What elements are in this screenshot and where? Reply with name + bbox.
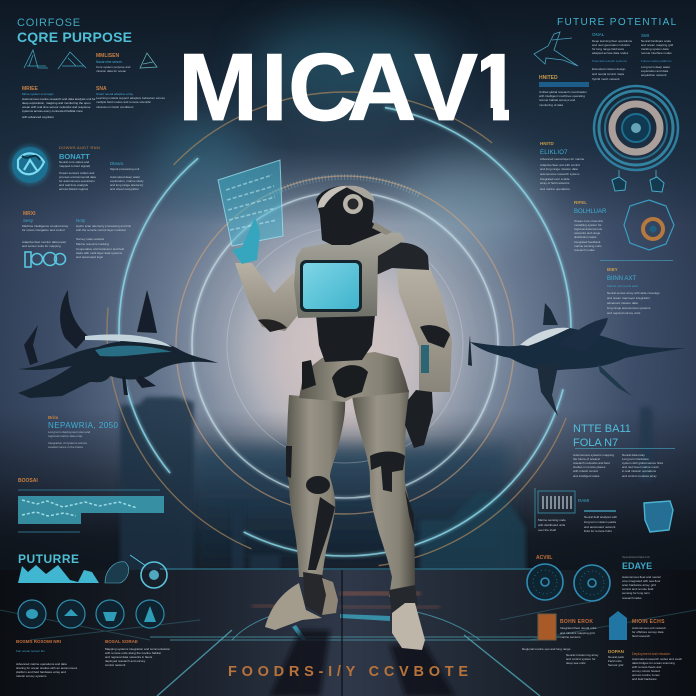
text block: columns: acquisition network: [641, 73, 667, 77]
text block: deep: and long range telemetry: [110, 183, 144, 187]
text block: columns: and next generation robotics: [592, 43, 630, 47]
text block: lower right: in real mission operations: [622, 469, 657, 473]
text block: columns: SMI: [641, 33, 649, 38]
text block: hinn: Marine unit neural pack: [607, 284, 639, 288]
heading: core purpose: [17, 17, 132, 45]
robot: left leg: [286, 395, 345, 577]
text block: mrxi: Noty: [76, 218, 86, 223]
text block: hnited: [539, 75, 589, 107]
robot: right hand: [405, 390, 433, 448]
text block: hinn: long range autonomous systems: [607, 306, 651, 310]
text block: lower right: Long term hardware: [622, 457, 649, 461]
text block: hnitd: integrated over a wide: [540, 177, 570, 181]
text block: lower notes: DOPAN: [608, 649, 624, 654]
text block: rifel: [574, 200, 607, 252]
text block: orange card: and robotics mapping grid: [560, 631, 595, 635]
robot: right arm: [397, 266, 452, 392]
text block: mission: deep exploration, mapping and monitoring the open: [22, 101, 91, 105]
text block: lower notes: [522, 647, 682, 681]
text block: rifel: research nodes: [574, 248, 595, 252]
text block: sna: Learning models support adaptive behaviour across: [96, 96, 165, 100]
text block: blue card: MIOIN ECHS: [632, 619, 665, 625]
text block: mrxi: [22, 211, 131, 259]
text block: intro: mission data for ocean: [96, 69, 127, 73]
text block: sna: multiple field modes and remote scientific: [96, 100, 151, 104]
heading: ntte bali: [573, 423, 631, 449]
text block: lower right: and intelligent tasks: [573, 474, 600, 478]
text block: sna: SNA: [96, 86, 107, 92]
text block: bonatt: BONATT: [59, 152, 90, 161]
text block: sna: [96, 86, 165, 109]
text block: rifel: modelling system for: [574, 223, 602, 227]
icon: wing sketch: [534, 32, 578, 66]
text block: mrxi: Hydro scan telemetry processing and link: [76, 224, 131, 228]
text block: lower notes: Sensor grid: [608, 663, 624, 667]
heading: future potential: FUTURE POTENTIAL: [557, 17, 677, 28]
left shark: [18, 290, 218, 398]
text block: lower left: Fan ocean sensor tkn: [16, 649, 45, 653]
text block: deep: Automated deep water: [110, 175, 140, 179]
text block: mission: MRIEE: [22, 86, 38, 92]
robot: left hand: [232, 217, 260, 264]
text block: columns: for long range field tests: [592, 47, 625, 51]
text block: device: Marine sensing node: [538, 518, 566, 522]
text block: hnitd: [540, 141, 585, 191]
text block: mrxi: Cooperative unit behaviour and field: [76, 247, 124, 251]
text block: columns: Long term deep water: [641, 65, 670, 69]
text block: lower right: system with global sensor links: [622, 461, 664, 465]
text block: lower right: with robotic control: [573, 469, 598, 473]
robot: head: [316, 186, 392, 245]
text block: lower notes: Regional marine ops and long range: [522, 647, 571, 651]
text block: blue card: [632, 619, 666, 638]
text block: deep: Dteam.: [110, 161, 125, 166]
text block: device: links for remote hubs: [584, 529, 612, 533]
text block: lower right: the future of oceanic: [573, 457, 601, 461]
text block: bonatt: Ocean sensors collect and: [59, 171, 95, 175]
text block: hinn: [600, 260, 673, 315]
icon: cyan device: [644, 501, 673, 532]
text block: lower left: sharing for ocean studies with an autonomous: [16, 666, 78, 670]
text block: columns: remote interface nodes: [641, 51, 672, 55]
text block: mrxi: Machine intelligence coupled array: [22, 224, 69, 228]
text block: hnitd: ELIKLIO7: [540, 150, 568, 156]
text block: deep: Signal processing unit: [110, 167, 140, 171]
text block: lower right: [573, 448, 675, 478]
text block: lower right: and control modules array: [622, 474, 657, 478]
city skyline: [120, 397, 653, 572]
icon: blue orb: [10, 145, 50, 185]
text block: columns: adapted across data nodes: [592, 51, 629, 55]
text block: columns: Deep learning fleet operations: [592, 39, 633, 43]
bottom caption: FOODRS-I/Y CCVBOTE: [228, 664, 468, 680]
text block: mrxi: Marine resource tracking: [76, 242, 109, 246]
text block: edaye: Operational field unit: [622, 555, 650, 559]
chart: swirl circle: [594, 86, 678, 192]
text block: mrxi: Adaptive fleet monitor data panel: [22, 240, 66, 244]
text block: device: over the shelf: [538, 528, 556, 532]
text block: rifel: RIFEL: [574, 200, 587, 205]
text block: mrxi: Sesy: [23, 218, 34, 223]
text block: hnitd: Advanced neural layer for marine: [540, 157, 585, 161]
text block: rifel: distribution tasks: [574, 235, 597, 239]
text block: intro: [96, 53, 131, 73]
chart: second swirl: [624, 200, 674, 250]
text block: edaye: scan hardware array, grid: [622, 583, 656, 587]
heading: ntte bali: NTTE BA11: [573, 423, 631, 435]
text block: intro: MMLISEN: [96, 53, 119, 59]
text block: lower notes: and field hardware: [632, 677, 657, 681]
text block: mission: systems across every connected habitat zone: [22, 109, 83, 113]
text block: lower right: Neural data relay: [622, 453, 645, 457]
text block: hinn: BIINN AXT: [607, 276, 636, 282]
text block: columns: exploration and data: [641, 69, 669, 73]
text block: orange card: BOHN EROK: [560, 619, 593, 625]
text block: bonatt: [59, 145, 100, 191]
panel: location date: [48, 415, 119, 449]
text block: hinn: BIBY: [607, 267, 618, 272]
text block: rifel: BOLHLUAR: [574, 209, 607, 215]
text block: hnited: monitoring of data: [539, 103, 563, 107]
text block: rifel: Ocean core cross link: [574, 219, 603, 223]
icon: dark creature: [105, 562, 129, 583]
text block: deep: exploration, marine study: [110, 179, 144, 183]
robot: chest: [294, 232, 405, 318]
text block: lower right: research networks and field: [573, 461, 610, 465]
panel: location date: Integration of systems across: [48, 441, 88, 445]
title: MICAV: [178, 34, 478, 141]
text block: bonatt: and real time analysis: [59, 183, 89, 187]
text block: deep: and visual recognition: [110, 187, 139, 191]
text block: columns: ONAL: [592, 32, 605, 37]
text block: blue card: for offshore survey data: [632, 630, 664, 634]
text block: device: with distributed units: [538, 523, 566, 527]
text block: hnitd: and marine operations: [540, 187, 570, 191]
text block: bonatt: for autonomous operations: [59, 179, 95, 183]
panel: future: [16, 552, 170, 678]
text block: lower left: BOSMS ROSOMI NRI: [16, 639, 61, 644]
robot: pelvis: [299, 352, 409, 402]
text block: hinn: advanced mission data: [607, 301, 638, 305]
text block: columns: Neural hardware scale: [641, 39, 671, 43]
chart: wave: [18, 565, 99, 583]
text block: rifel: marine sensing units: [574, 244, 602, 248]
text block: rifel: networks and range: [574, 231, 601, 235]
icons: four rounds: [18, 600, 164, 628]
panel: location date: coastal zones in the future: [48, 445, 83, 449]
text block: lower right: Autonomous systems mapping: [573, 453, 614, 457]
heading: core purpose: COIRFOSE: [17, 17, 81, 29]
text block: device: and automated network: [584, 525, 616, 529]
text block: bonatt: process environmental data: [59, 175, 96, 179]
robot: left foot: [265, 583, 322, 630]
robot: [232, 186, 452, 650]
text block: edaye: core integrated with sea floor: [622, 579, 661, 583]
text block: orange card: Integrated fleet neural units: [560, 626, 597, 630]
text block: lower left: Advanced marine operations and data: [16, 662, 67, 666]
text block: columns: Extended mission design: [592, 67, 626, 71]
text block: mrxi: for ocean navigation and control: [22, 228, 65, 232]
chart: twin gauges: [527, 564, 610, 601]
text block: hnitd: HNITD: [540, 141, 554, 146]
text block: hinn: and regional survey units: [607, 311, 641, 315]
robot: right leg: [352, 390, 415, 597]
text block: hnitd: array of field networks: [540, 181, 570, 185]
text block: edaye: sensing for long term: [622, 591, 651, 595]
text block: lower notes: Field units: [608, 659, 622, 663]
text block: device: [538, 498, 617, 533]
text block: lower right: and next level marine mesh: [622, 465, 659, 469]
text block: lower notes: data bridges for ocean scanning: [632, 661, 675, 665]
text block: orange card: marine sensors: [560, 635, 581, 639]
icons: line drawings: [24, 50, 157, 69]
text block: lower left: with remote units along the marine habitat: [105, 651, 161, 655]
text block: mission: with advanced cognition: [22, 115, 54, 119]
text block: lower left: Mapping systems integration and communication: [105, 647, 170, 651]
text block: hnited: remote habitat surveys and: [539, 98, 576, 102]
robot: leg joints: [286, 446, 418, 618]
title: [184, 52, 509, 122]
text block: hnited: Unified global research coordination: [539, 90, 587, 94]
panel: data map: [18, 478, 164, 532]
text block: lower left: deployed research and survey: [105, 659, 146, 663]
text block: bonatt: mapped current signals: [59, 164, 91, 168]
text block: hnitd: and long range mission data: [540, 167, 578, 171]
text block: device: long term mission packs: [584, 520, 617, 524]
panel: location date: Long term deployment plan and: [48, 430, 91, 434]
text block: mrxi: tasks with multi layer data systems: [76, 251, 123, 255]
panel: future potential: [522, 17, 682, 681]
heading: future: PUTURRE: [18, 552, 80, 566]
text block: lower right: studies in remote places: [573, 465, 606, 469]
text block: lower left: BOSAL SORAE: [105, 639, 138, 644]
text block: lower left: platform and field hardware array and: [16, 670, 66, 674]
text block: edaye: research tasks: [622, 596, 642, 600]
icon: orange card: [538, 614, 556, 640]
chart: bar grid: [535, 488, 575, 528]
text block: mrxi: and sensor suite for mapping: [22, 244, 61, 248]
text block: sna: Smart neural adaptive array: [96, 92, 134, 96]
icons: sensor row: [25, 252, 66, 267]
text block: rings label: ACVIIL: [536, 555, 552, 561]
text block: lower left: control network: [105, 663, 126, 667]
text block: lower notes: and control system for: [566, 657, 596, 661]
text block: device: Neural field analysis with: [584, 515, 617, 519]
floor: [0, 568, 696, 696]
text block: mission: ocean with real time sensor networks and response: [22, 105, 91, 109]
text block: blue card: Autonomous unit network: [632, 626, 666, 630]
text block: lower left: [16, 639, 170, 678]
text block: columns: [592, 32, 674, 81]
title: 1: [469, 34, 522, 141]
panel: core purpose: [10, 17, 165, 267]
text block: lower notes: deep sea units: [566, 661, 586, 665]
text block: lower notes: survey robots hosted: [632, 669, 660, 673]
text block: lower notes: Neural mission log array: [566, 653, 599, 657]
text block: columns: Future marine platform: [641, 59, 672, 63]
text block: intro: Core system purpose and: [96, 65, 131, 69]
robot: left arm: [235, 263, 298, 331]
robot: right foot: [392, 603, 425, 650]
text block: bonatt: Neural core status and: [59, 160, 90, 164]
text block: mrxi: MRXI: [23, 211, 36, 217]
text block: rifel: integrated feedback: [574, 240, 601, 244]
text block: edaye: [622, 555, 661, 600]
text block: blue card: field research: [632, 634, 650, 638]
text block: edaye: EDAYE: [622, 561, 652, 571]
text block: lower notes: Deployment and mission: [632, 652, 670, 656]
text block: columns: Potential network systems: [592, 59, 627, 63]
heading: core purpose: CQRE PURPOSE: [17, 29, 132, 45]
panel: location date: Brim: [48, 415, 58, 420]
text block: mrxi: with the remote control layer modules: [76, 228, 126, 232]
text block: rifel: regional autonomous: [574, 227, 603, 231]
text block: hnitd: autonomous research system: [540, 172, 580, 176]
text block: mrxi: and automated logic: [76, 255, 104, 259]
text block: hnitd: Adaptive fleet unit with control: [540, 163, 580, 167]
panel: data map: BOOSAI: [18, 478, 38, 484]
text block: columns: and neural control maps: [592, 72, 625, 76]
text block: lower notes: Automated research nodes and mesh: [632, 657, 682, 661]
text block: lower left: and regional data networks in fleets: [105, 655, 153, 659]
text block: hinn: Neural sensor array with wide coverage: [607, 291, 660, 295]
heading: ntte bali: FOLA N7: [573, 437, 618, 449]
icon: blue card: [609, 611, 627, 640]
text block: deep: [110, 161, 144, 191]
text block: mrxi: Survey node network: [76, 237, 105, 241]
text block: orange card: [560, 619, 597, 639]
text block: intro: Naual ntne senner: [96, 60, 123, 64]
robot: waist: [316, 315, 375, 362]
text block: columns: tracking system data: [641, 47, 669, 51]
text block: lower notes: Neural pack: [608, 655, 625, 659]
panel: location date: regional marine sites map: [48, 434, 83, 438]
text block: sna: missions in harsh conditions: [96, 105, 134, 109]
text block: edaye: Autonomous fleet and neural: [622, 575, 661, 579]
holographic panel: [218, 160, 283, 246]
text block: bonatt: across distant regions: [59, 187, 89, 191]
text block: hinn: and ocean map layer integration: [607, 296, 650, 300]
text block: columns: and ocean mapping grid: [641, 43, 674, 47]
text block: hnited: with intelligent machines operating: [539, 94, 585, 98]
panel: location date: NEPAWRIA, 2050: [48, 421, 119, 430]
text block: lower notes: across marine zones: [632, 673, 660, 677]
text block: edaye: control and remote field: [622, 587, 654, 591]
text block: hnited: HNITED: [539, 75, 558, 81]
text block: mission: Mrine system core logic: [22, 92, 54, 96]
text block: lower notes: with remote fleets and: [632, 665, 662, 669]
text block: columns: hybrid mesh network: [592, 77, 620, 81]
text block: device: RAMI: [578, 498, 589, 503]
text block: lower left: robotic survey systems: [16, 674, 47, 678]
text block: mission: Autonomous marine research and data analysis unit for: [22, 97, 96, 101]
right shark: [468, 303, 686, 416]
text block: bonatt: DOWNS AUDT RNN: [59, 145, 100, 150]
text block: mission: [22, 86, 96, 119]
concentric rings: [107, 92, 583, 568]
icon: target ring: [130, 555, 167, 588]
